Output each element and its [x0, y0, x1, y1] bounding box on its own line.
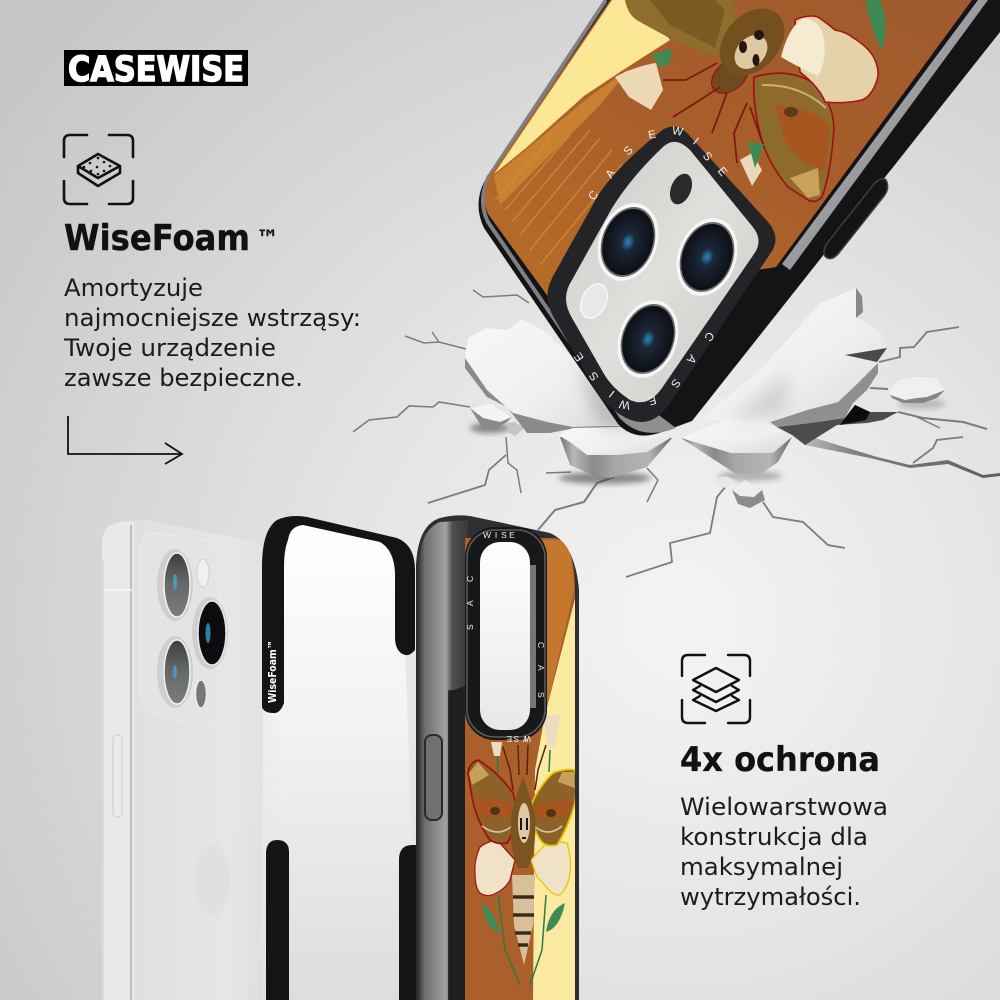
text: WiseFoam description: zawsze bezpieczne. — [64, 364, 303, 392]
crack wedge right — [805, 435, 1000, 478]
wood base — [465, 530, 577, 1000]
ring lettering: CASEWISE — [572, 329, 716, 411]
text: WiseFoam description: Amortyzuje — [64, 274, 203, 302]
wood base — [484, 0, 972, 296]
foam strip: lower right — [399, 845, 418, 1000]
moth: hind wing — [754, 73, 834, 201]
ring lettering: WISE — [483, 530, 515, 540]
moth: upper wing shading — [650, 0, 725, 48]
lens top-left — [587, 194, 669, 290]
moth: left upper wing — [468, 760, 516, 844]
yellow section — [533, 595, 577, 1000]
back body — [102, 520, 285, 1000]
text: 4x ochrona description: wytrzymałości. — [680, 883, 861, 911]
logo watermark — [194, 844, 230, 916]
lens 3 — [157, 636, 193, 708]
block: lower right — [681, 419, 792, 474]
moth: abdomen bands — [513, 897, 534, 945]
text: WiseFoam description — [63, 274, 361, 392]
ring lettering — [465, 530, 546, 744]
moth: wing eyes — [490, 807, 556, 817]
side button — [113, 735, 122, 817]
moth: wing stripes — [482, 826, 562, 832]
icon: layers — [682, 655, 750, 723]
dark side lower — [449, 686, 465, 1000]
ring lettering: CAS — [536, 642, 546, 698]
legs — [503, 745, 546, 790]
moth: wing bands — [472, 796, 574, 818]
crack gap right — [777, 405, 898, 445]
flower lower — [740, 153, 762, 186]
text: 4x ochrona description: konstrukcja dla — [680, 823, 868, 851]
moth: hind wing band — [775, 105, 830, 172]
left rim highlight — [483, 0, 622, 418]
text: 4x ochrona description — [680, 793, 888, 911]
moth: thorax — [511, 777, 535, 868]
crack hole — [840, 405, 870, 425]
ring highlight — [467, 530, 545, 737]
moth: lower body — [710, 64, 748, 94]
moth: hind wing veins — [762, 85, 826, 108]
flowers — [491, 715, 560, 756]
moth: abdomen — [512, 875, 535, 965]
leaves — [482, 903, 565, 933]
heading: 4x ochrona: 4x ochrona — [680, 739, 880, 779]
ring inner edge — [530, 565, 536, 708]
moth: left lower wing — [475, 840, 515, 896]
heading: WiseFoam: WiseFoam — [64, 217, 250, 259]
heading: WiseFoam: ™ — [256, 225, 279, 253]
lens 2 — [192, 597, 228, 669]
phone: clear case side view — [416, 515, 579, 1000]
moth: skull marks — [521, 818, 527, 838]
ring lettering: CAS — [465, 576, 475, 630]
leaves — [652, 0, 886, 168]
moth: right upper wing — [532, 769, 576, 846]
camera ring — [547, 126, 776, 422]
lens right — [666, 209, 748, 305]
stems — [497, 750, 550, 985]
phone: white back — [102, 520, 418, 1000]
text: WiseFoam description: Twoje urządzenie — [63, 334, 276, 362]
moth: skull — [518, 803, 530, 843]
moth: upper wing — [625, 0, 735, 57]
camera plateau — [140, 532, 219, 726]
impact shading on slabs — [575, 360, 790, 430]
lens bottom — [607, 291, 689, 387]
sensor — [196, 680, 206, 708]
camera plate — [566, 142, 759, 402]
lens 1 — [157, 549, 193, 621]
bottom clear bump — [618, 410, 676, 433]
moth: legs — [663, 63, 764, 163]
moth: skull eyes — [739, 30, 764, 66]
ring window — [480, 542, 530, 730]
yellow sky — [494, 0, 670, 174]
text: 4x ochrona description: maksymalnej — [680, 853, 843, 881]
flash — [576, 280, 612, 322]
arrow — [68, 416, 182, 464]
moth: cream wing fan — [781, 18, 825, 76]
sensor — [666, 170, 696, 208]
text: 4x ochrona description: Wielowarstwowa — [680, 793, 888, 821]
moth: hind wing fan — [790, 168, 820, 198]
chips — [470, 376, 945, 508]
cast shadows under blocks — [470, 399, 946, 484]
clear case area — [262, 522, 418, 1000]
phone: top case with moth artwork — [470, 0, 1000, 436]
side button — [824, 179, 888, 259]
ring lettering: CASEWISE — [586, 125, 729, 203]
foam label: WiseFoam™ — [266, 640, 279, 703]
block: lower left — [558, 427, 672, 478]
moth: skull — [734, 35, 768, 69]
artwork — [484, 0, 972, 296]
side strip — [102, 522, 134, 1000]
wood grain — [494, 130, 622, 282]
crack lines — [353, 290, 987, 577]
metal side — [419, 520, 468, 1000]
slab: left — [465, 319, 640, 440]
logo: CASEWISE — [68, 48, 244, 89]
flower — [615, 63, 663, 110]
text: WiseFoam description: najmocniejsze wstrząsy: — [64, 304, 361, 332]
upper wood grain — [542, 540, 574, 706]
case frame — [416, 515, 579, 1000]
ring lettering: ESIW — [506, 734, 531, 744]
side button — [425, 735, 442, 820]
foam strip: top — [262, 516, 415, 713]
ring — [465, 527, 547, 740]
slab: right — [700, 288, 887, 427]
illustration: cracked wall impact — [353, 288, 1000, 577]
moth: head — [720, 8, 784, 75]
ring lettering — [572, 125, 729, 411]
moth: wing tips — [469, 762, 575, 788]
flash — [197, 559, 209, 587]
moth: cream wing outer — [795, 16, 878, 103]
glossy side strip — [782, 0, 988, 270]
artwork — [465, 530, 577, 1000]
moth: right lower wing — [531, 840, 571, 895]
light wood band — [494, 68, 630, 205]
icon: foam pad — [64, 135, 133, 204]
foam strip: lower left — [266, 840, 289, 1000]
case body — [478, 0, 1000, 436]
moth: hind wing eye — [784, 107, 798, 117]
